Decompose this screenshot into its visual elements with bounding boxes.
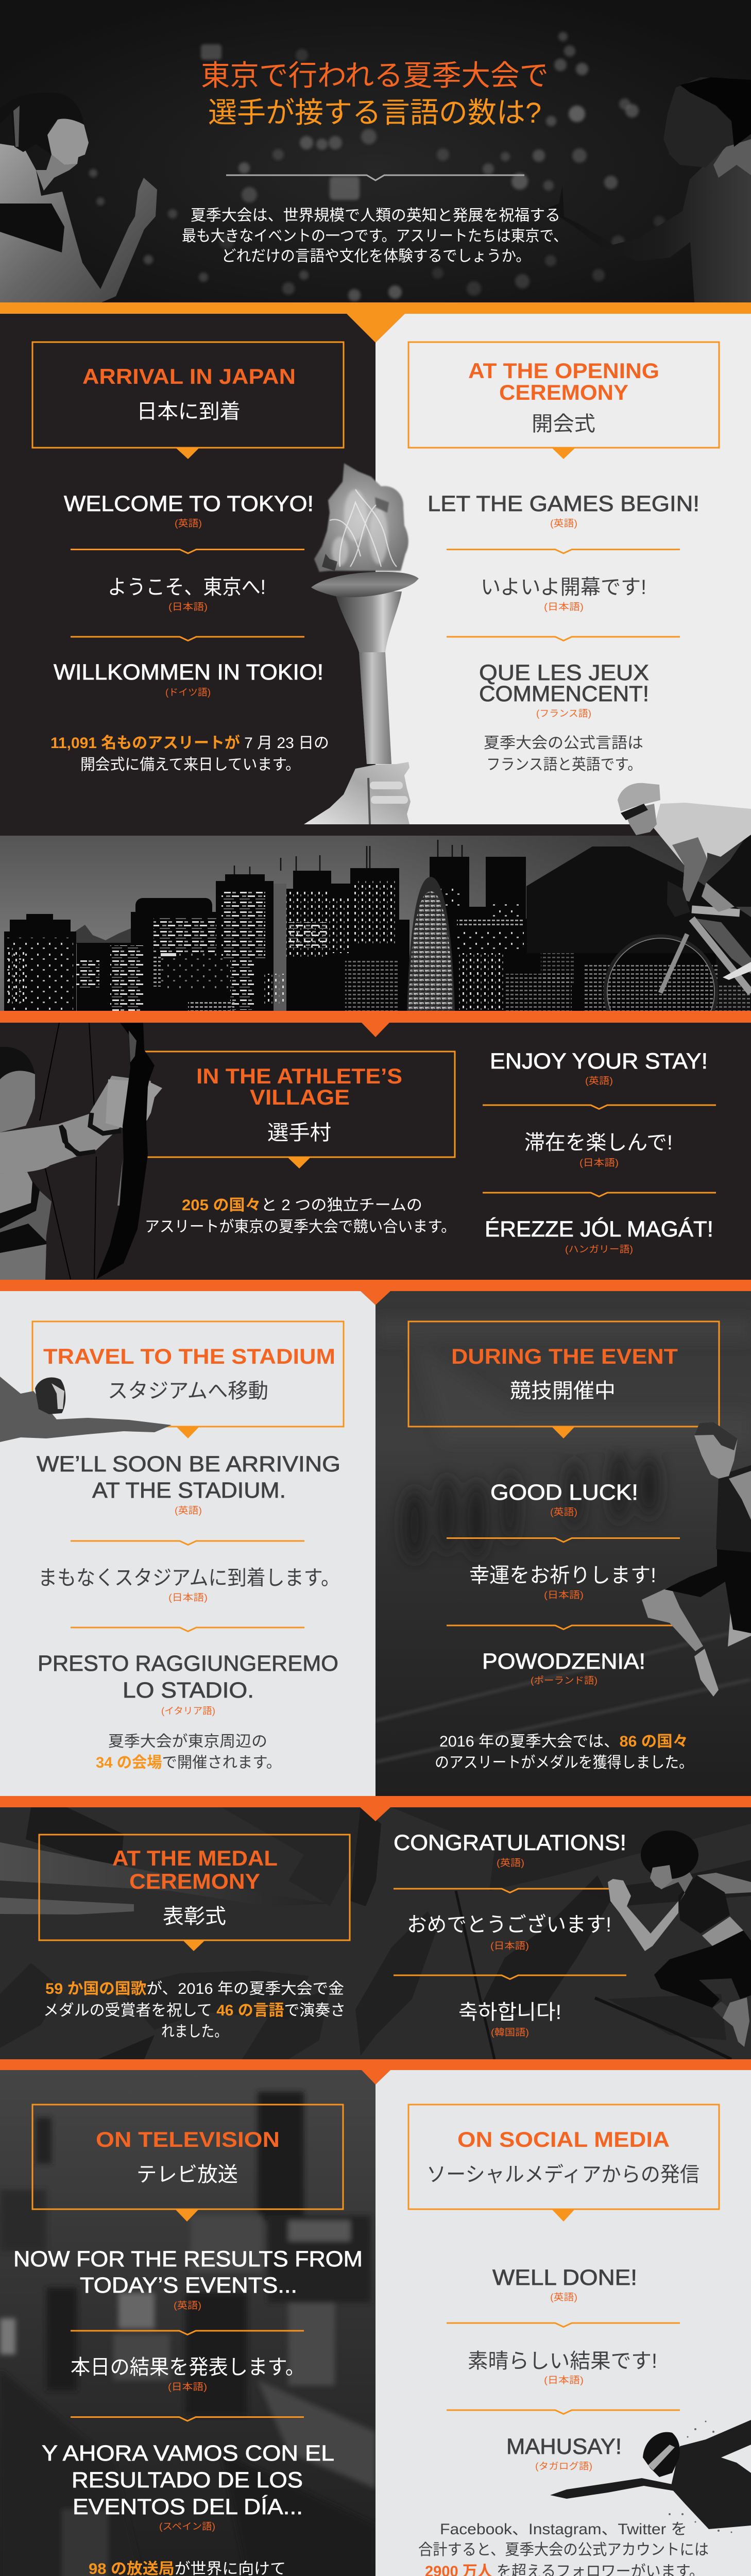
phrase: English: [490, 1480, 638, 1517]
panel: opening ceremony: [376, 314, 751, 836]
panel: on social media: [376, 2070, 751, 2576]
fact text: 夏季大会の公式言語は: [484, 735, 643, 752]
phrase: English: (英語): [497, 1858, 524, 1868]
phrase: Polish: POWODZENIA!: [482, 1649, 645, 1674]
phrase: English: WELL DONE!: [492, 2265, 637, 2290]
fact text: 11,091 名ものアスリートが 7 月 23 日の: [50, 734, 329, 752]
heading box: ARRIVAL IN JAPAN: [82, 364, 296, 388]
panel: arrival in Japan: [0, 314, 376, 836]
heading box: 日本に到着: [136, 400, 241, 423]
phrase: Polish: [482, 1649, 645, 1686]
phrase: English: TODAY’S EVENTS...: [80, 2273, 297, 2298]
fact text: [43, 1980, 346, 2040]
phrase: English: [64, 492, 314, 529]
phrase: English: (英語): [175, 518, 202, 529]
runner woman photo: [0, 93, 157, 304]
phrase: French: QUE LES JEUX: [479, 660, 649, 685]
fact text: [50, 734, 329, 773]
phrase: Japanese: いよいよ開幕です!: [481, 576, 646, 599]
panel: athlete's village: [0, 1023, 751, 1280]
fact text: 2016 年の夏季大会では、86 の国々: [439, 1733, 688, 1750]
fact text: 34 の会場で開催されます。: [96, 1754, 281, 1771]
heading box: [408, 2105, 719, 2222]
phrase: Japanese: [469, 1564, 656, 1600]
phrase: Italian: LO STADIO.: [123, 1678, 254, 1703]
main title: [201, 59, 549, 129]
photo: swimmer: [0, 1377, 172, 1442]
phrase: Spanish: RESULTADO DE LOS: [72, 2468, 303, 2493]
phrase: German: WILLKOMMEN IN TOKIO!: [54, 660, 323, 685]
phrase: Spanish: [42, 2441, 334, 2532]
intro paragraph: 夏季大会は、世界規模で人類の英知と発展を祝福する: [191, 207, 560, 224]
main title: 東京で行われる夏季大会で: [201, 59, 549, 92]
phrase: English: [428, 492, 699, 529]
phrase: English: (英語): [550, 1507, 577, 1517]
orange band with pointer: [0, 1796, 751, 1821]
phrase: Japanese: 本日の結果を発表します。: [71, 2356, 305, 2379]
phrase: English: [37, 1452, 340, 1516]
phrase: Korean: (韓国語): [491, 2027, 529, 2038]
heading box: ON SOCIAL MEDIA: [457, 2127, 670, 2151]
phrase: Japanese: [481, 576, 646, 612]
phrase: English: AT THE STADIUM.: [92, 1478, 286, 1503]
fact text: 夏季大会が東京周辺の: [108, 1733, 267, 1750]
title divider: [226, 175, 524, 180]
heading box: [145, 1052, 455, 1168]
heading box: DURING THE EVENT: [451, 1344, 678, 1368]
icon: torch with flame and hand: [304, 463, 419, 824]
heading box: 選手村: [267, 1122, 331, 1144]
phrase: Japanese: [524, 1131, 673, 1168]
athlete man photo: [528, 77, 751, 302]
fact text: 合計すると、夏季大会の公式アカウントには: [418, 2541, 709, 2558]
phrase: Japanese: (日本語): [544, 2375, 584, 2385]
orange band with pointer: [0, 2059, 751, 2084]
intro paragraph: 最も大きなイベントの一つです。アスリートたちは東京で、: [182, 228, 568, 245]
phrase: French: COMMENCENT!: [479, 682, 649, 706]
fact text: フランス語と英語です。: [486, 756, 642, 773]
phrase: Japanese: 幸運をお祈りします!: [469, 1564, 656, 1587]
phrase: English: (英語): [550, 2292, 577, 2302]
hero background: night city bokeh: [0, 0, 751, 302]
heading box: [32, 2105, 343, 2222]
heading box: スタジアムへ移動: [108, 1380, 268, 1402]
heading box: ソーシャルメディアからの発信: [426, 2163, 699, 2186]
phrase: Japanese: [108, 576, 266, 612]
photo: flags background: [0, 1807, 751, 2059]
heading box: [39, 1835, 350, 1951]
flame: [314, 463, 408, 572]
heading box: AT THE OPENING: [468, 359, 659, 383]
heading box: [408, 342, 719, 459]
phrase: English: (英語): [550, 518, 577, 529]
photo: aerial city: [0, 2070, 390, 2576]
heading box: TRAVEL TO THE STADIUM: [43, 1344, 335, 1368]
fact text: [96, 1733, 281, 1771]
fact text: 開会式に備えて来日しています。: [80, 756, 300, 773]
phrase: English: WE’LL SOON BE ARRIVING: [37, 1452, 340, 1477]
phrase: Japanese: (日本語): [168, 2382, 207, 2392]
phrase: Japanese: (日本語): [579, 1158, 619, 1168]
orange band with pointer: [0, 302, 751, 343]
skyline photo: [0, 836, 751, 1011]
torch body: [335, 591, 402, 764]
phrase: Spanish: (スペイン語): [159, 2521, 215, 2532]
heading box: 表彰式: [163, 1905, 226, 1928]
phrase: Tagalog: (タガログ語): [535, 2461, 592, 2471]
phrase: English: CONGRATULATIONS!: [394, 1831, 626, 1855]
phrase: Japanese: [71, 2356, 305, 2392]
phrase: English: [13, 2247, 363, 2311]
heading box: ON TELEVISION: [96, 2127, 280, 2151]
phrase: English: GOOD LUCK!: [490, 1480, 638, 1505]
heading box: VILLAGE: [250, 1085, 350, 1109]
fact text: 59 か国の国歌が、2016 年の夏季大会で金: [45, 1980, 344, 1997]
panel: travel to the stadium: [0, 1291, 376, 1796]
phrase: Hungarian: (ハンガリー語): [565, 1244, 633, 1255]
heading box: CEREMONY: [129, 1869, 260, 1893]
phrase: Japanese: [468, 2350, 657, 2385]
fact text: Facebook、Instagram、Twitter を: [440, 2521, 687, 2538]
phrase: English: [490, 1049, 708, 1086]
heading box: AT THE MEDAL: [112, 1846, 278, 1870]
fact text: のアスリートがメダルを獲得しました。: [435, 1754, 693, 1771]
phrase: French: (フランス語): [536, 708, 591, 719]
phrase: Italian: PRESTO RAGGIUNGEREMO: [38, 1651, 338, 1676]
phrase: Japanese: 素晴らしい結果です!: [468, 2350, 657, 2372]
photo: swimmer woman: [550, 2420, 751, 2533]
photo: sprinter woman: [608, 1831, 751, 2047]
phrase: Korean: 축하합니다!: [458, 2001, 561, 2024]
intro paragraph: どれだけの言語や文化を体験するでしょうか。: [221, 248, 531, 265]
heading box: 競技開催中: [510, 1380, 616, 1402]
phrase: Japanese: ようこそ、東京へ!: [108, 576, 266, 599]
photo: archer: [0, 1023, 162, 1280]
phrase: English: [394, 1831, 626, 1868]
phrase: Polish: (ポーランド語): [531, 1675, 598, 1686]
fact text: [418, 2521, 709, 2576]
phrase: English: WELCOME TO TOKYO!: [64, 492, 314, 516]
phrase: English: (英語): [174, 2300, 201, 2311]
fact text: 205 の国々と 2 つの独立チームの: [182, 1197, 422, 1214]
phrase: Hungarian: ÉREZZE JÓL MAGÁT!: [485, 1217, 713, 1242]
phrase: Japanese: 滞在を楽しんで!: [524, 1131, 673, 1154]
main title: 選手が接する言語の数は?: [208, 96, 541, 129]
phrase: English: NOW FOR THE RESULTS FROM: [13, 2247, 363, 2272]
phrase: Japanese: (日本語): [168, 1592, 208, 1603]
orange band with pointer: [0, 1280, 751, 1305]
heading box: 開会式: [532, 413, 595, 435]
intro paragraph: [182, 207, 568, 265]
phrase: German: [54, 660, 323, 698]
photo: cyclist: [605, 783, 751, 1047]
phrase: English: ENJOY YOUR STAY!: [490, 1049, 708, 1074]
panel: on television: [0, 2070, 390, 2576]
heading box: [408, 1321, 719, 1438]
hero section: [0, 0, 751, 304]
heading box: IN THE ATHLETE’S: [196, 1064, 402, 1088]
phrase: English: (英語): [175, 1505, 202, 1516]
phrase: Tagalog: MAHUSAY!: [506, 2434, 622, 2459]
fact text: [435, 1733, 693, 1771]
phrase: French: [479, 660, 649, 719]
heading box: CEREMONY: [499, 380, 628, 404]
hand: [304, 762, 411, 824]
orange band with pointer: [0, 1011, 751, 1037]
phrase: English: [492, 2265, 637, 2302]
phrase: German: (ドイツ語): [165, 687, 211, 698]
panel: medal ceremony: [0, 1807, 751, 2059]
phrase: Italian: [38, 1651, 338, 1716]
fact text: れました。: [161, 2023, 228, 2040]
fact text: [484, 735, 643, 773]
phrase: Japanese: [38, 1567, 340, 1603]
phrase: Korean: [458, 2001, 561, 2038]
fact text: メダルの受賞者を祝して 46 の言語で演奏さ: [43, 2002, 346, 2019]
panel: during the event: [376, 1291, 751, 1796]
phrase: Japanese: (日本語): [168, 602, 208, 612]
phrase: Italian: (イタリア語): [161, 1706, 215, 1716]
phrase: Japanese: (日本語): [490, 1941, 529, 1951]
phrase: Japanese: おめでとうございます!: [407, 1913, 611, 1936]
photo: blurred stadium track: [376, 1291, 751, 1796]
phrase: Spanish: EVENTOS DEL DÍA...: [73, 2495, 303, 2519]
phrase: Japanese: (日本語): [544, 1590, 584, 1600]
phrase: Tagalog: [506, 2434, 622, 2471]
phrase: Hungarian: [485, 1217, 713, 1255]
heading box: [32, 342, 344, 459]
heading box: テレビ放送: [136, 2163, 238, 2186]
phrase: Spanish: Y AHORA VAMOS CON EL: [42, 2441, 334, 2466]
fact text: アスリートが東京の夏季大会で競い合います。: [145, 1218, 456, 1235]
fact text: [145, 1197, 456, 1235]
phrase: English: LET THE GAMES BEGIN!: [428, 492, 699, 516]
heading box: [32, 1321, 344, 1438]
phrase: English: (英語): [585, 1076, 613, 1086]
phrase: Japanese: (日本語): [544, 602, 584, 612]
building windows: [6, 877, 751, 1011]
phrase: Japanese: まもなくスタジアムに到着します。: [38, 1567, 340, 1589]
phrase: Japanese: [407, 1913, 611, 1951]
photo: jumping athlete: [642, 1422, 751, 1697]
